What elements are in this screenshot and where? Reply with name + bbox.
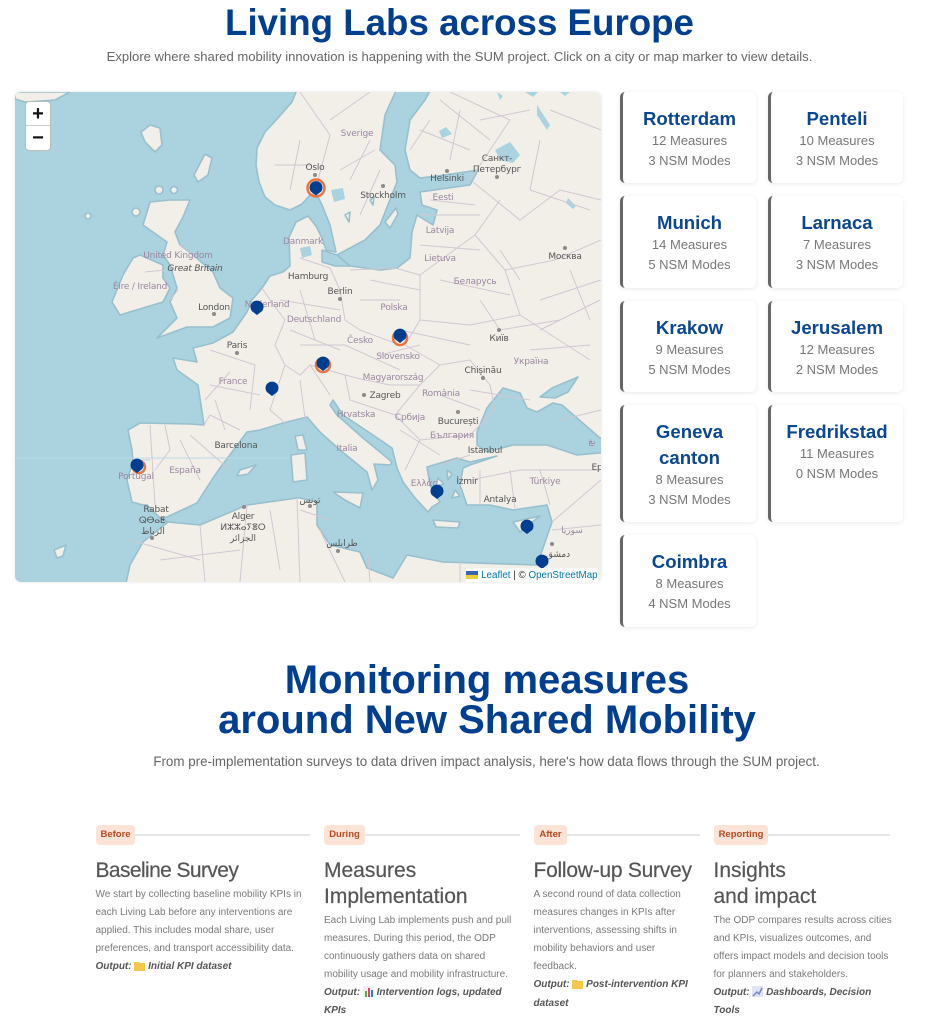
map labels: Nederland: [245, 300, 289, 310]
map labels: Portugal: [118, 472, 154, 482]
step: Insights and impact: for planners and stakeholders.: [714, 969, 848, 980]
step: Measures Implementation: continuously gathers data on shared: [324, 951, 485, 962]
city card: Munich: Munich: [657, 212, 722, 233]
map markers: [130, 181, 549, 569]
map labels: Lietuva: [424, 254, 456, 264]
step: Measures Implementation: Each Living Lab implements push and pull: [324, 915, 511, 926]
map labels: ⵍⵣⵣⴰⵢⴻⵔ: [220, 523, 266, 533]
city card: Geneva canton: Geneva: [656, 421, 723, 442]
map labels: Ελλάς: [411, 479, 437, 489]
city card: Munich: [620, 196, 756, 288]
step: Insights and impact: [714, 859, 892, 1016]
city card: Jerusalem: [768, 301, 903, 392]
map labels: București: [438, 417, 478, 427]
map labels: Éire / Ireland: [113, 280, 167, 292]
city card: Fredrikstad: [768, 405, 903, 522]
attribution: [466, 568, 598, 582]
orange selection rings: [133, 180, 407, 473]
city card: Penteli: Penteli: [807, 108, 867, 129]
step: Insights and impact: offers impact models and decision tools: [714, 951, 888, 962]
map labels: İzmir: [456, 476, 478, 487]
badge: After: [534, 825, 567, 845]
Great Britain: [143, 200, 233, 338]
map labels: Москва: [548, 252, 582, 262]
city card: Larnaca: 7 Measures: [803, 237, 871, 252]
heading: Monitoring measures: [218, 658, 756, 742]
marker: Coimbra: [130, 459, 144, 473]
city card: Penteli: 10 Measures: [799, 133, 875, 148]
city card: Rotterdam: 3 NSM Modes: [648, 152, 731, 168]
map labels: Magyarország: [363, 373, 423, 383]
heading: Monitoring measures: around New Shared Mobility: [218, 698, 756, 742]
marker: Fredrikstad: [310, 181, 322, 196]
badge: Before: [96, 825, 135, 845]
city card: Larnaca: Larnaca: [801, 212, 873, 233]
map labels: [113, 129, 603, 560]
title: Living Labs across Europe: Living Labs across Europe: [225, 2, 694, 43]
map labels: Hamburg: [288, 272, 328, 282]
map labels: Петербург: [473, 165, 522, 175]
badge: After: After: [539, 829, 562, 840]
map labels: Türkiye: [529, 477, 561, 487]
city card: Geneva canton: 8 Measures: [656, 472, 723, 487]
step: Measures Implementation: [324, 859, 511, 1016]
map labels: London: [198, 303, 230, 313]
step: Follow-up Survey: measures changes in KPIs after: [534, 907, 675, 918]
map labels: Danmark: [283, 237, 324, 247]
map labels: Eesti: [433, 193, 453, 203]
step: Baseline Survey: Output: Initial KPI dataset: [96, 961, 232, 972]
city card: Geneva canton: [620, 405, 756, 522]
city card: Larnaca: [768, 196, 903, 288]
map labels: Slovensko: [376, 352, 420, 362]
city card: Coimbra: 8 Measures: [656, 576, 723, 591]
map labels: Istanbul: [468, 446, 502, 456]
city card: Krakow: 5 NSM Modes: [648, 362, 731, 376]
step: Measures Implementation: Measures: [324, 859, 416, 882]
badge: During: [324, 825, 365, 845]
city card: Rotterdam: 12 Measures: [652, 133, 727, 148]
map labels: Stockholm: [360, 191, 406, 201]
marker: Larnaca: [520, 520, 534, 534]
map labels: Great Britain: [167, 264, 223, 274]
step: Insights and impact: Tools: [714, 1005, 740, 1016]
map labels: Berlin: [328, 287, 352, 297]
map labels: Україна: [514, 357, 548, 367]
step: Measures Implementation: Output: Intervention logs, updated: [324, 987, 502, 998]
city card: Munich: 5 NSM Modes: [648, 256, 731, 272]
zoom controls: [25, 101, 51, 151]
step: Measures Implementation: mobility usage and mobility infrastructure.: [324, 969, 508, 980]
city card: Jerusalem: 2 NSM Modes: [796, 362, 878, 376]
city card: Rotterdam: [620, 92, 756, 183]
city card: Fredrikstad: 0 NSM Modes: [796, 466, 878, 480]
map labels: Zagreb: [370, 391, 401, 401]
zoom controls: +: [32, 103, 44, 125]
map labels: France: [219, 377, 248, 387]
map labels: Київ: [489, 334, 509, 344]
map labels: Italia: [336, 444, 358, 454]
map labels: Oslo: [306, 163, 325, 173]
step: Insights and impact: Output: Dashboards, Decision: [714, 987, 871, 998]
badge: During: During: [329, 829, 360, 840]
step: Baseline Survey: each Living Lab before any interventions are: [96, 907, 292, 918]
map labels: الرباط: [141, 527, 165, 537]
map labels: United Kingdom: [143, 251, 213, 261]
step: Baseline Survey: [96, 859, 302, 972]
step: Follow-up Survey: [534, 859, 692, 1009]
step: Baseline Survey: We start by collecting baseline mobility KPIs in: [96, 889, 302, 900]
step: Follow-up Survey: A second round of data collection: [534, 889, 681, 900]
city card: Coimbra: [620, 535, 756, 627]
map labels: Polska: [380, 303, 408, 313]
city card: Coimbra: Coimbra: [652, 551, 727, 572]
map labels: Antalya: [484, 495, 516, 505]
map labels: دمشق: [546, 550, 570, 560]
map labels: ⵕⴱⴰⵟ: [139, 516, 166, 526]
step: Follow-up Survey: mobility behaviors and user: [534, 943, 655, 954]
marker: Penteli: [430, 485, 444, 499]
map labels: Helsinki: [430, 174, 464, 184]
lakes: [300, 92, 576, 258]
map labels: România: [422, 389, 460, 399]
marker: Krakow: [394, 329, 406, 343]
map panel: [15, 92, 601, 582]
map labels: България: [430, 431, 474, 441]
city card: Jerusalem: Jerusalem: [791, 317, 883, 338]
map labels: Hrvatska: [337, 410, 375, 420]
city card: Geneva canton: canton: [659, 447, 720, 468]
map labels: Deutschland: [287, 315, 341, 325]
city card: Larnaca: 3 NSM Modes: [796, 256, 878, 272]
badge: Before: Before: [100, 829, 131, 840]
step: Follow-up Survey: Output: Post-intervention KPI: [534, 979, 688, 990]
step: Follow-up Survey: dataset: [534, 998, 569, 1009]
city card: Krakow: Krakow: [656, 317, 723, 338]
map labels: Alger: [232, 512, 255, 522]
step: Follow-up Survey: feedback.: [534, 961, 577, 972]
city card: Krakow: 9 Measures: [656, 342, 723, 357]
map labels: España: [169, 466, 201, 476]
city card: Jerusalem: 12 Measures: [799, 342, 875, 357]
step: Insights and impact: The ODP compares results across cities: [714, 915, 892, 926]
map labels: الجزائر: [229, 534, 256, 544]
map labels: Беларусь: [454, 277, 496, 287]
step: Baseline Survey: preferences, and transport accessibility data.: [96, 943, 294, 954]
city card: Penteli: [768, 92, 903, 183]
map labels: Paris: [227, 341, 248, 351]
map labels: سوريا: [561, 526, 583, 536]
borders: [130, 92, 601, 582]
map labels: بغ: [588, 437, 596, 447]
marker: Rotterdam: [251, 301, 264, 315]
map labels: Санкт-: [482, 154, 512, 164]
marker: Geneva: [266, 382, 278, 396]
step: Follow-up Survey: interventions, assessing shifts in: [534, 925, 677, 936]
map labels: Chișinău: [464, 366, 502, 376]
map labels: Sverige: [341, 129, 374, 139]
step: Measures Implementation: KPIs: [324, 1005, 346, 1016]
map labels: Barcelona: [214, 441, 258, 451]
city card: Krakow: [620, 301, 756, 392]
city card: Fredrikstad: 11 Measures: [800, 446, 874, 461]
city card: Penteli: 3 NSM Modes: [796, 152, 878, 168]
map labels: Česko: [347, 334, 374, 346]
badge: Reporting: [714, 825, 768, 845]
attribution: Leaflet | © OpenStreetMap: [481, 570, 598, 581]
step: Follow-up Survey: Follow-up Survey: [534, 859, 692, 882]
subtitle: explore text: Explore where shared mobility innovation is happening with the SUM project. Click on a city or map marker to view details.: [107, 49, 812, 64]
step: Baseline Survey: applied. This includes modal share, user: [96, 925, 274, 936]
subtitle: data flow: From pre-implementation surveys to data driven impact analysis, here's how data flows through the SUM project.: [153, 754, 820, 769]
step: Baseline Survey: Baseline Survey: [96, 859, 238, 882]
map labels: Rabat: [143, 505, 169, 515]
badge: Reporting: Reporting: [719, 829, 763, 840]
city card: Fredrikstad: Fredrikstad: [786, 421, 888, 442]
map labels: Србија: [395, 413, 425, 423]
marker: Munich: [316, 357, 330, 371]
step: Insights and impact: and impact: [714, 885, 816, 908]
city card: Munich: 14 Measures: [652, 237, 727, 252]
map labels: Latvija: [426, 226, 454, 236]
map labels: طرابلس: [326, 539, 358, 549]
step: Measures Implementation: measures. During this period, the ODP: [324, 933, 496, 944]
map labels: تونس: [299, 496, 321, 506]
city card: Geneva canton: 3 NSM Modes: [648, 492, 731, 506]
marker: Jerusalem: [536, 555, 549, 569]
zoom controls: −: [32, 127, 44, 149]
heading: Monitoring measures: Monitoring measures: [285, 658, 689, 702]
city card: Rotterdam: Rotterdam: [643, 108, 736, 129]
city card: Coimbra: 4 NSM Modes: [648, 596, 731, 610]
step: Insights and impact: and KPIs, visualizes outcomes, and: [714, 933, 871, 944]
step: Measures Implementation: Implementation: [324, 885, 468, 908]
step: Insights and impact: Insights: [714, 859, 786, 882]
